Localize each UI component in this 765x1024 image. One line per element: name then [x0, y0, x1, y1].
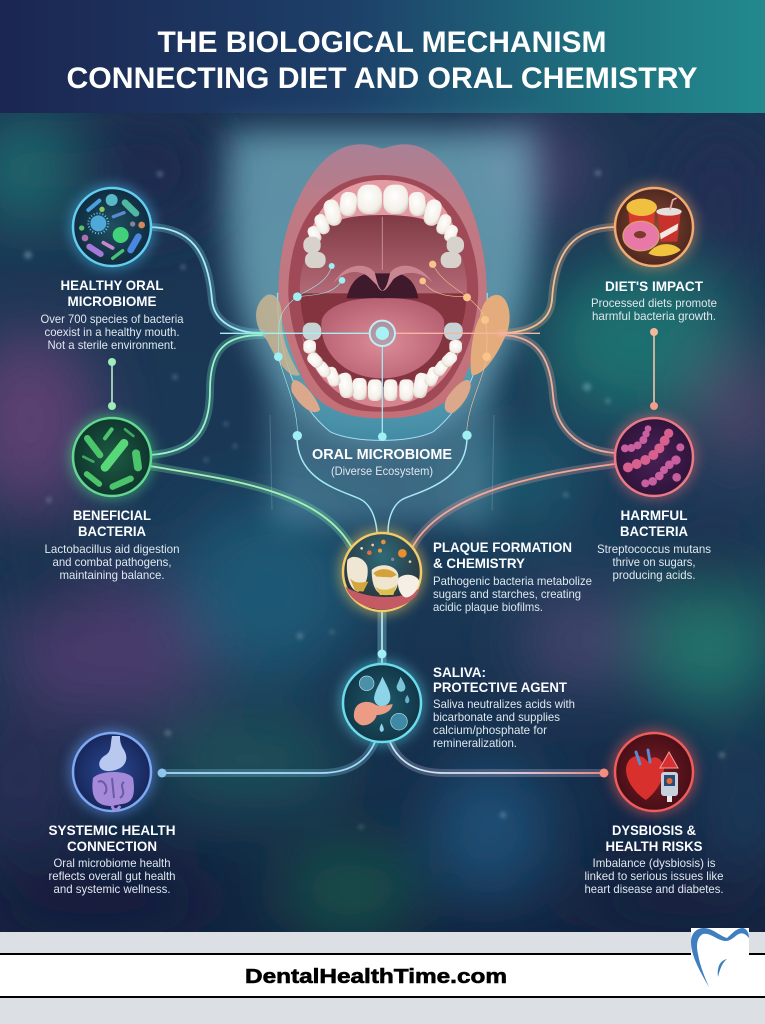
text block: calcium/phosphate for — [433, 723, 547, 737]
text block — [584, 856, 724, 896]
palate — [300, 211, 467, 293]
icon: heart and glucose meter — [611, 729, 697, 815]
title: CONNECTING DIET AND ORAL CHEMISTRY — [66, 62, 698, 95]
text block: linked to serious issues like — [584, 869, 724, 883]
text block: Not a sterile environment. — [48, 338, 176, 352]
heading: BENEFICIAL — [73, 507, 151, 523]
text block — [40, 312, 184, 352]
heading: DYSBIOSIS & — [612, 822, 696, 838]
tongue — [321, 298, 444, 378]
text block: maintaining balance. — [60, 568, 164, 582]
title: THE BIOLOGICAL MECHANISM — [158, 26, 606, 59]
jaw: translucent lower face — [277, 293, 487, 440]
central node — [370, 321, 395, 346]
panel: harmful bacteria — [597, 414, 711, 582]
icon: saliva drops and gland — [339, 660, 425, 746]
icon: processed food — [611, 184, 697, 270]
label: oral microbiome: ORAL MICROBIOME — [312, 447, 452, 463]
heading: & CHEMISTRY — [433, 555, 526, 571]
text block — [44, 542, 180, 582]
text block: and combat pathogens, — [52, 555, 172, 569]
label: oral microbiome: (Diverse Ecosystem) — [331, 464, 433, 478]
heading: MICROBIOME — [68, 293, 156, 309]
heading — [433, 539, 572, 571]
heading: HARMFUL — [620, 507, 688, 523]
text block — [433, 574, 592, 614]
icon: streptococcus chains — [611, 414, 697, 500]
panel: beneficial bacteria — [44, 414, 180, 582]
icon: mixed microbes — [69, 184, 155, 270]
panel: diet's impact — [591, 184, 717, 323]
text block: Saliva neutralizes acids with — [433, 697, 575, 711]
text block: and systemic wellness. — [54, 882, 170, 896]
heading: PROTECTIVE AGENT — [433, 679, 567, 695]
lower gum — [302, 333, 465, 407]
heading: PLAQUE FORMATION — [433, 539, 572, 555]
text block: Lactobacillus aid digestion — [44, 542, 180, 556]
text block: Oral microbiome health — [54, 856, 170, 870]
text block: Streptococcus mutans — [597, 542, 711, 556]
text block — [597, 542, 711, 582]
panel: systemic health connection — [48, 729, 176, 896]
connector: healthy to beneficial — [108, 358, 116, 410]
text block: Processed diets promote — [591, 296, 717, 310]
connector: diet to harmful — [650, 328, 658, 410]
text block: acidic plaque biofilms. — [433, 600, 543, 614]
heading: DIET'S IMPACT — [605, 278, 703, 294]
connector: oral microbiome to plaque — [297, 437, 467, 532]
illustration: face and neck silhouette — [220, 125, 545, 525]
text block: sugars and starches, creating — [433, 587, 581, 601]
text block: thrive on sugars, — [612, 555, 696, 569]
connector: saliva to dysbiosis — [390, 742, 608, 778]
text block — [591, 296, 717, 323]
text block: Over 700 species of bacteria — [40, 312, 184, 326]
lower teeth — [303, 323, 463, 401]
connector: healthy microbiome to mouth — [150, 227, 262, 333]
text block: remineralization. — [433, 736, 517, 750]
text block: harmful bacteria growth. — [592, 309, 716, 323]
text block: bicarbonate and supplies — [433, 710, 560, 724]
header band — [0, 0, 765, 113]
text block — [48, 856, 176, 896]
heading: CONNECTION — [67, 838, 157, 854]
heading: SALIVA: — [433, 664, 486, 680]
text block: coexist in a healthy mouth. — [44, 325, 180, 339]
heading — [433, 664, 567, 695]
heading — [606, 822, 702, 854]
lips — [278, 144, 487, 418]
illustration: open mouth — [220, 144, 540, 441]
heading: SYSTEMIC HEALTH — [48, 822, 176, 838]
upper teeth — [303, 185, 464, 268]
footer band — [0, 932, 765, 1024]
throat — [347, 273, 418, 298]
connector: diet to mouth — [500, 227, 614, 333]
decoration — [24, 170, 725, 829]
icon: teeth with plaque — [339, 529, 425, 615]
panel: healthy oral microbiome — [40, 184, 184, 352]
arches and uvula — [333, 266, 433, 291]
panel: plaque formation and chemistry — [339, 529, 592, 615]
icon: green rod bacteria — [69, 414, 155, 500]
heading — [48, 822, 176, 854]
title — [66, 26, 698, 95]
heading — [60, 277, 164, 309]
text block: Imbalance (dysbiosis) is — [592, 856, 716, 870]
heading: HEALTHY ORAL — [60, 277, 164, 293]
gum shading top — [308, 180, 458, 240]
heading — [73, 507, 151, 539]
text block: reflects overall gut health — [48, 869, 176, 883]
connector: beneficial bacteria to plaque — [150, 466, 352, 548]
text block: heart disease and diabetes. — [584, 882, 724, 896]
nerve connections inside mouth — [278, 267, 342, 435]
heading: HEALTH RISKS — [606, 838, 702, 854]
panel: saliva protective agent — [339, 660, 575, 750]
connector: harmful bacteria to plaque — [412, 464, 615, 548]
salivary glands — [256, 295, 510, 413]
heading — [620, 507, 688, 539]
connector: saliva to systemic health — [158, 742, 375, 778]
text block: producing acids. — [612, 568, 696, 582]
text block: Pathogenic bacteria metabolize — [433, 574, 592, 588]
panel: dysbiosis and health risks — [584, 729, 724, 896]
footer website text: DentalHealthTime.com — [245, 966, 507, 988]
icon: stomach and intestines — [69, 729, 155, 815]
heading: BACTERIA — [620, 523, 688, 539]
label: oral microbiome — [312, 447, 452, 478]
heading: BACTERIA — [78, 523, 146, 539]
connector: plaque to saliva — [378, 610, 386, 666]
icon: tooth logo — [691, 928, 749, 988]
text block — [433, 697, 575, 750]
connector: harmful bacteria to mouth — [500, 335, 615, 453]
connector: beneficial bacteria to mouth — [150, 335, 262, 455]
